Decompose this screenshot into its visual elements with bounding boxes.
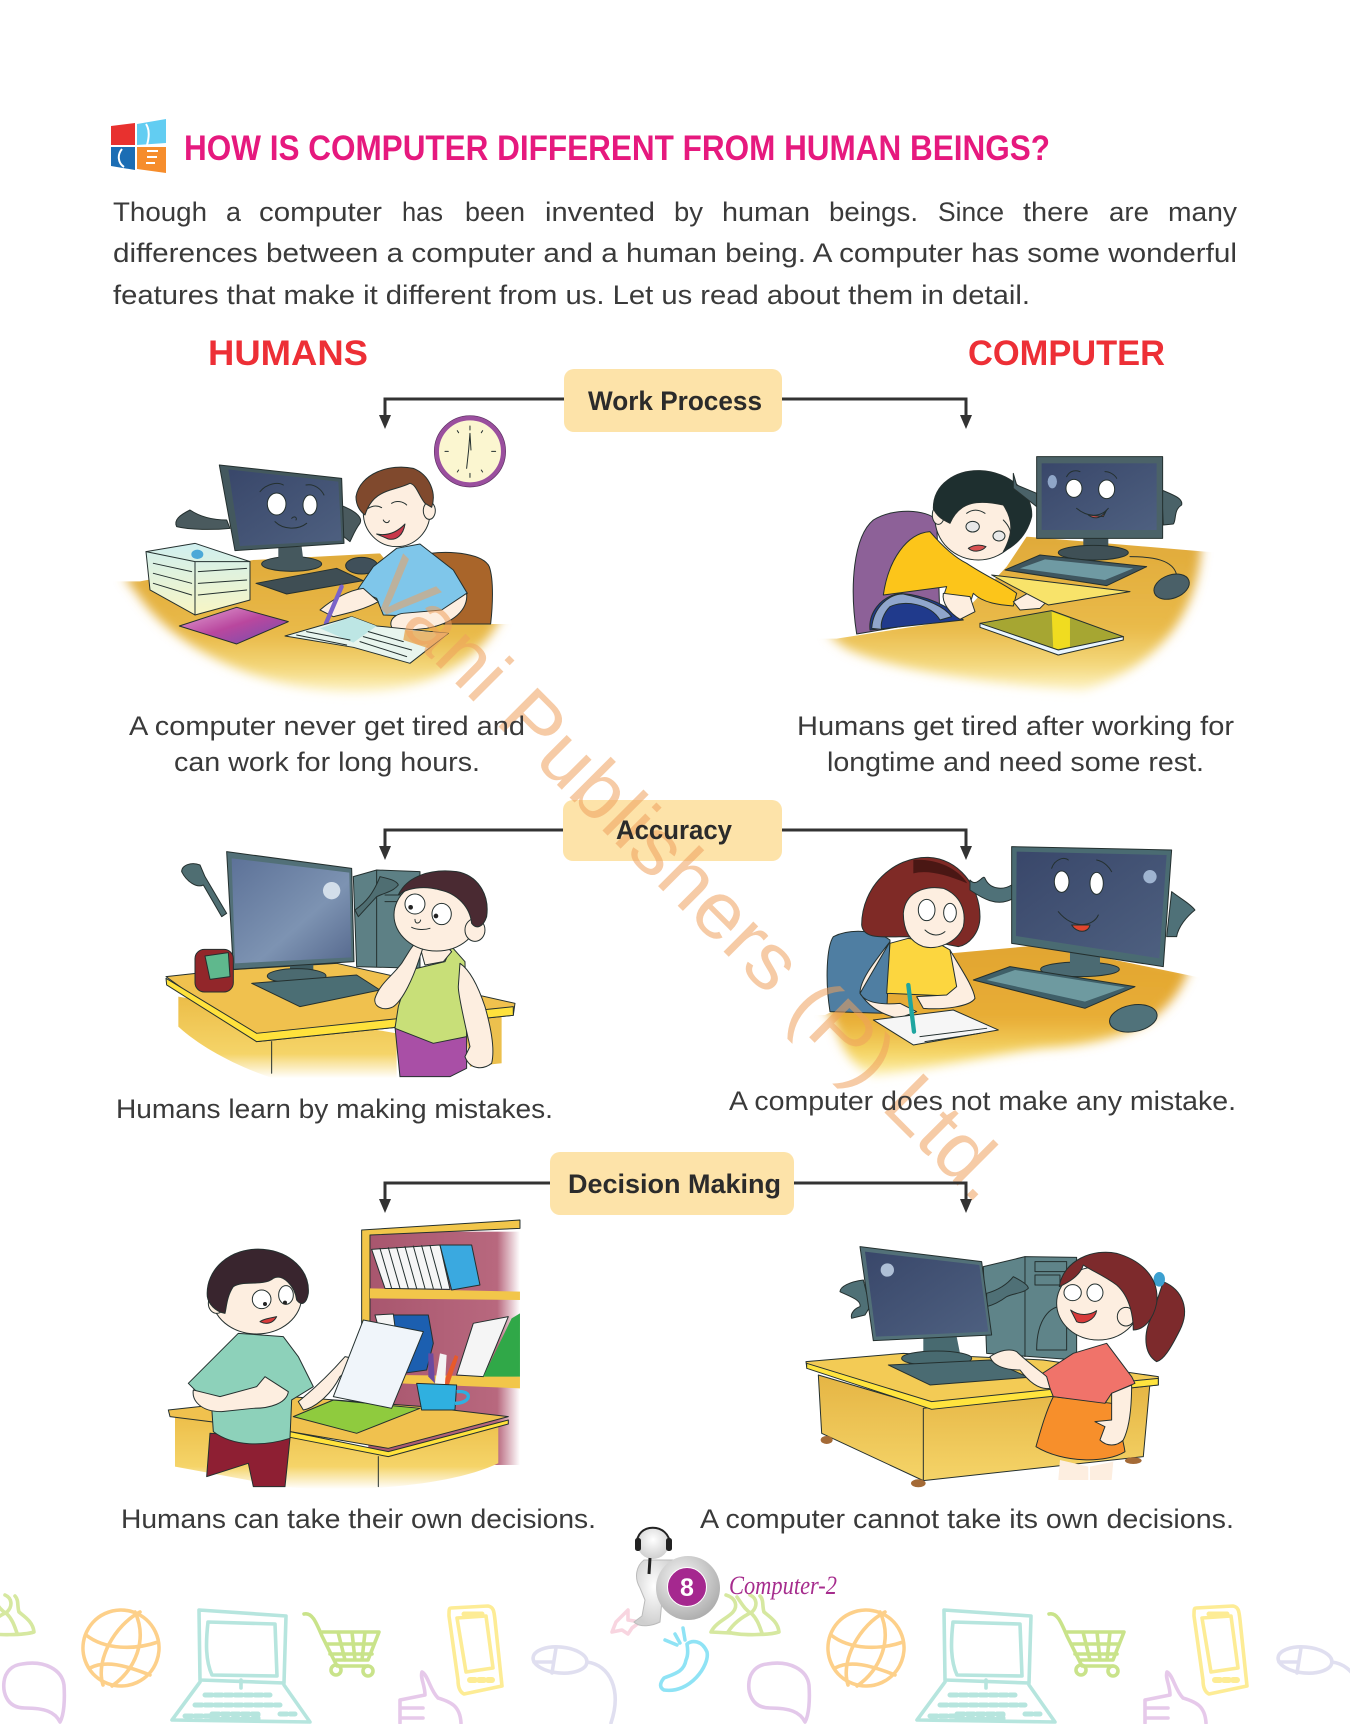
monitor (1013, 457, 1182, 560)
connector: work process arrows (379, 399, 972, 429)
intro paragraph: has (402, 197, 443, 227)
paper held by boy (333, 1320, 423, 1408)
doodle: smartphone (449, 1606, 502, 1694)
pencil cup (417, 1353, 468, 1410)
thinking boy (375, 871, 493, 1077)
title: HOW IS COMPUTER DIFFERENT FROM HUMAN BEINGS? (184, 129, 1050, 168)
doodle: pattern repeat (711, 1595, 1350, 1723)
label box: accuracy (563, 800, 782, 861)
doodle: thumbs up (400, 1672, 461, 1723)
illustration: girl and computer at desk (806, 1247, 1185, 1487)
desk (827, 527, 1202, 690)
heading: computer: COMPUTER (968, 333, 1165, 373)
doodle: laptop (172, 1610, 310, 1722)
monitor and tower (840, 1247, 1077, 1366)
chair (853, 511, 940, 634)
caption: computer never gets tired (129, 711, 525, 777)
boy (320, 467, 467, 632)
mouse (1107, 1001, 1159, 1036)
page number disc (656, 1556, 720, 1620)
intro paragraph: beings. (829, 197, 918, 227)
doodle: shopping cart (304, 1614, 379, 1676)
intro paragraph: Since (938, 197, 1004, 227)
intro paragraph: by (674, 197, 704, 227)
paper stack (146, 543, 250, 615)
label: decision making: Decision Making (568, 1169, 781, 1199)
pen (908, 985, 914, 1032)
connector: accuracy arrows (379, 830, 972, 860)
paper (873, 1010, 998, 1045)
yellow sheet (992, 575, 1130, 605)
keyboard (256, 568, 363, 594)
label box: work process (564, 369, 782, 432)
chair (827, 931, 890, 1013)
caption: computer never gets tired: A computer never get tired and (129, 711, 525, 741)
intro paragraph: been (465, 197, 525, 227)
intro paragraph: computer (259, 197, 382, 227)
monitor and tower (182, 852, 420, 983)
intro paragraph: there (1023, 197, 1089, 227)
page mascot with page number: 8 (680, 1574, 694, 1602)
intro paragraph: are (1109, 197, 1149, 227)
mascot figure (634, 1527, 674, 1626)
keyboard (888, 1360, 1028, 1385)
keyboard (1005, 555, 1147, 586)
intro paragraph: differences between a computer and a human being. A computer has some wonderful (113, 238, 1237, 268)
boy (870, 471, 1050, 630)
caption: humans get tired (797, 711, 1234, 777)
caption: humans get tired: longtime and need some rest. (827, 747, 1204, 777)
caption: humans decide: Humans can take their own decisions. (121, 1504, 596, 1534)
intro paragraph: Though (113, 197, 207, 227)
illustration: boy thinking at desk (166, 852, 515, 1078)
green book (980, 611, 1123, 655)
desk (806, 1353, 1158, 1487)
keyboard (252, 975, 380, 1007)
book name: Computer-2 (729, 1571, 837, 1600)
label: work process: Work Process (588, 386, 762, 416)
desk (823, 935, 1190, 1075)
desk (123, 543, 503, 692)
alarm clock (195, 949, 233, 992)
wall clock (434, 416, 506, 487)
label: accuracy: Accuracy (616, 815, 732, 845)
caption: humans get tired: Humans get tired after working for (797, 711, 1234, 741)
monitor (970, 847, 1195, 977)
footer doodle pattern (0, 1595, 1350, 1723)
illustration: boy working at computer with clock (123, 416, 506, 692)
mouse (1130, 557, 1193, 604)
open notebook (285, 617, 448, 663)
girl (990, 1252, 1185, 1480)
connector: decision making arrows (379, 1183, 972, 1213)
girl (860, 857, 980, 1018)
doodle: speech bubble (4, 1663, 64, 1722)
caption: computer does not make mistakes: A computer does not make any mistake. (729, 1086, 1236, 1116)
caption: humans learn by mistakes: Humans learn by making mistakes. (116, 1094, 553, 1124)
watermark: Vani Publishers (P) Ltd. (352, 541, 1029, 1218)
illustration: girl writing at computer (823, 847, 1195, 1075)
green book (293, 1400, 420, 1433)
caption: computer never gets tired: can work for long hours. (174, 747, 480, 777)
doodle: telephone (661, 1628, 707, 1690)
intro paragraph (113, 197, 1238, 310)
intro paragraph: features that make it different from us. Let us read about them in detail. (113, 280, 1030, 310)
intro paragraph: human (722, 197, 810, 227)
chair (430, 552, 492, 624)
caption: computer cannot decide: A computer cannot take its own decisions. (700, 1504, 1234, 1534)
keyboard (973, 967, 1135, 1008)
desk (166, 963, 515, 1078)
purple book (179, 607, 288, 644)
desk (168, 1397, 508, 1489)
mouse (346, 557, 378, 574)
intro paragraph: many (1168, 197, 1238, 227)
monitor (176, 465, 361, 571)
doodle: star (612, 1610, 640, 1634)
icon: title windows thumbs-up (111, 119, 166, 173)
illustration: boy deciding by bookshelf (168, 1220, 520, 1489)
boy (188, 1249, 360, 1487)
page mascot with page number (634, 1527, 720, 1626)
doodle: people (0, 1595, 34, 1635)
heading: humans: HUMANS (208, 333, 368, 373)
bookshelf (362, 1220, 520, 1465)
intro paragraph: a (226, 197, 241, 227)
illustration: tired boy at computer (827, 457, 1202, 690)
intro paragraph: invented (545, 197, 655, 227)
label box: decision making (550, 1152, 794, 1215)
doodle: globe (72, 1599, 170, 1697)
doodle: computer mouse (532, 1645, 615, 1723)
